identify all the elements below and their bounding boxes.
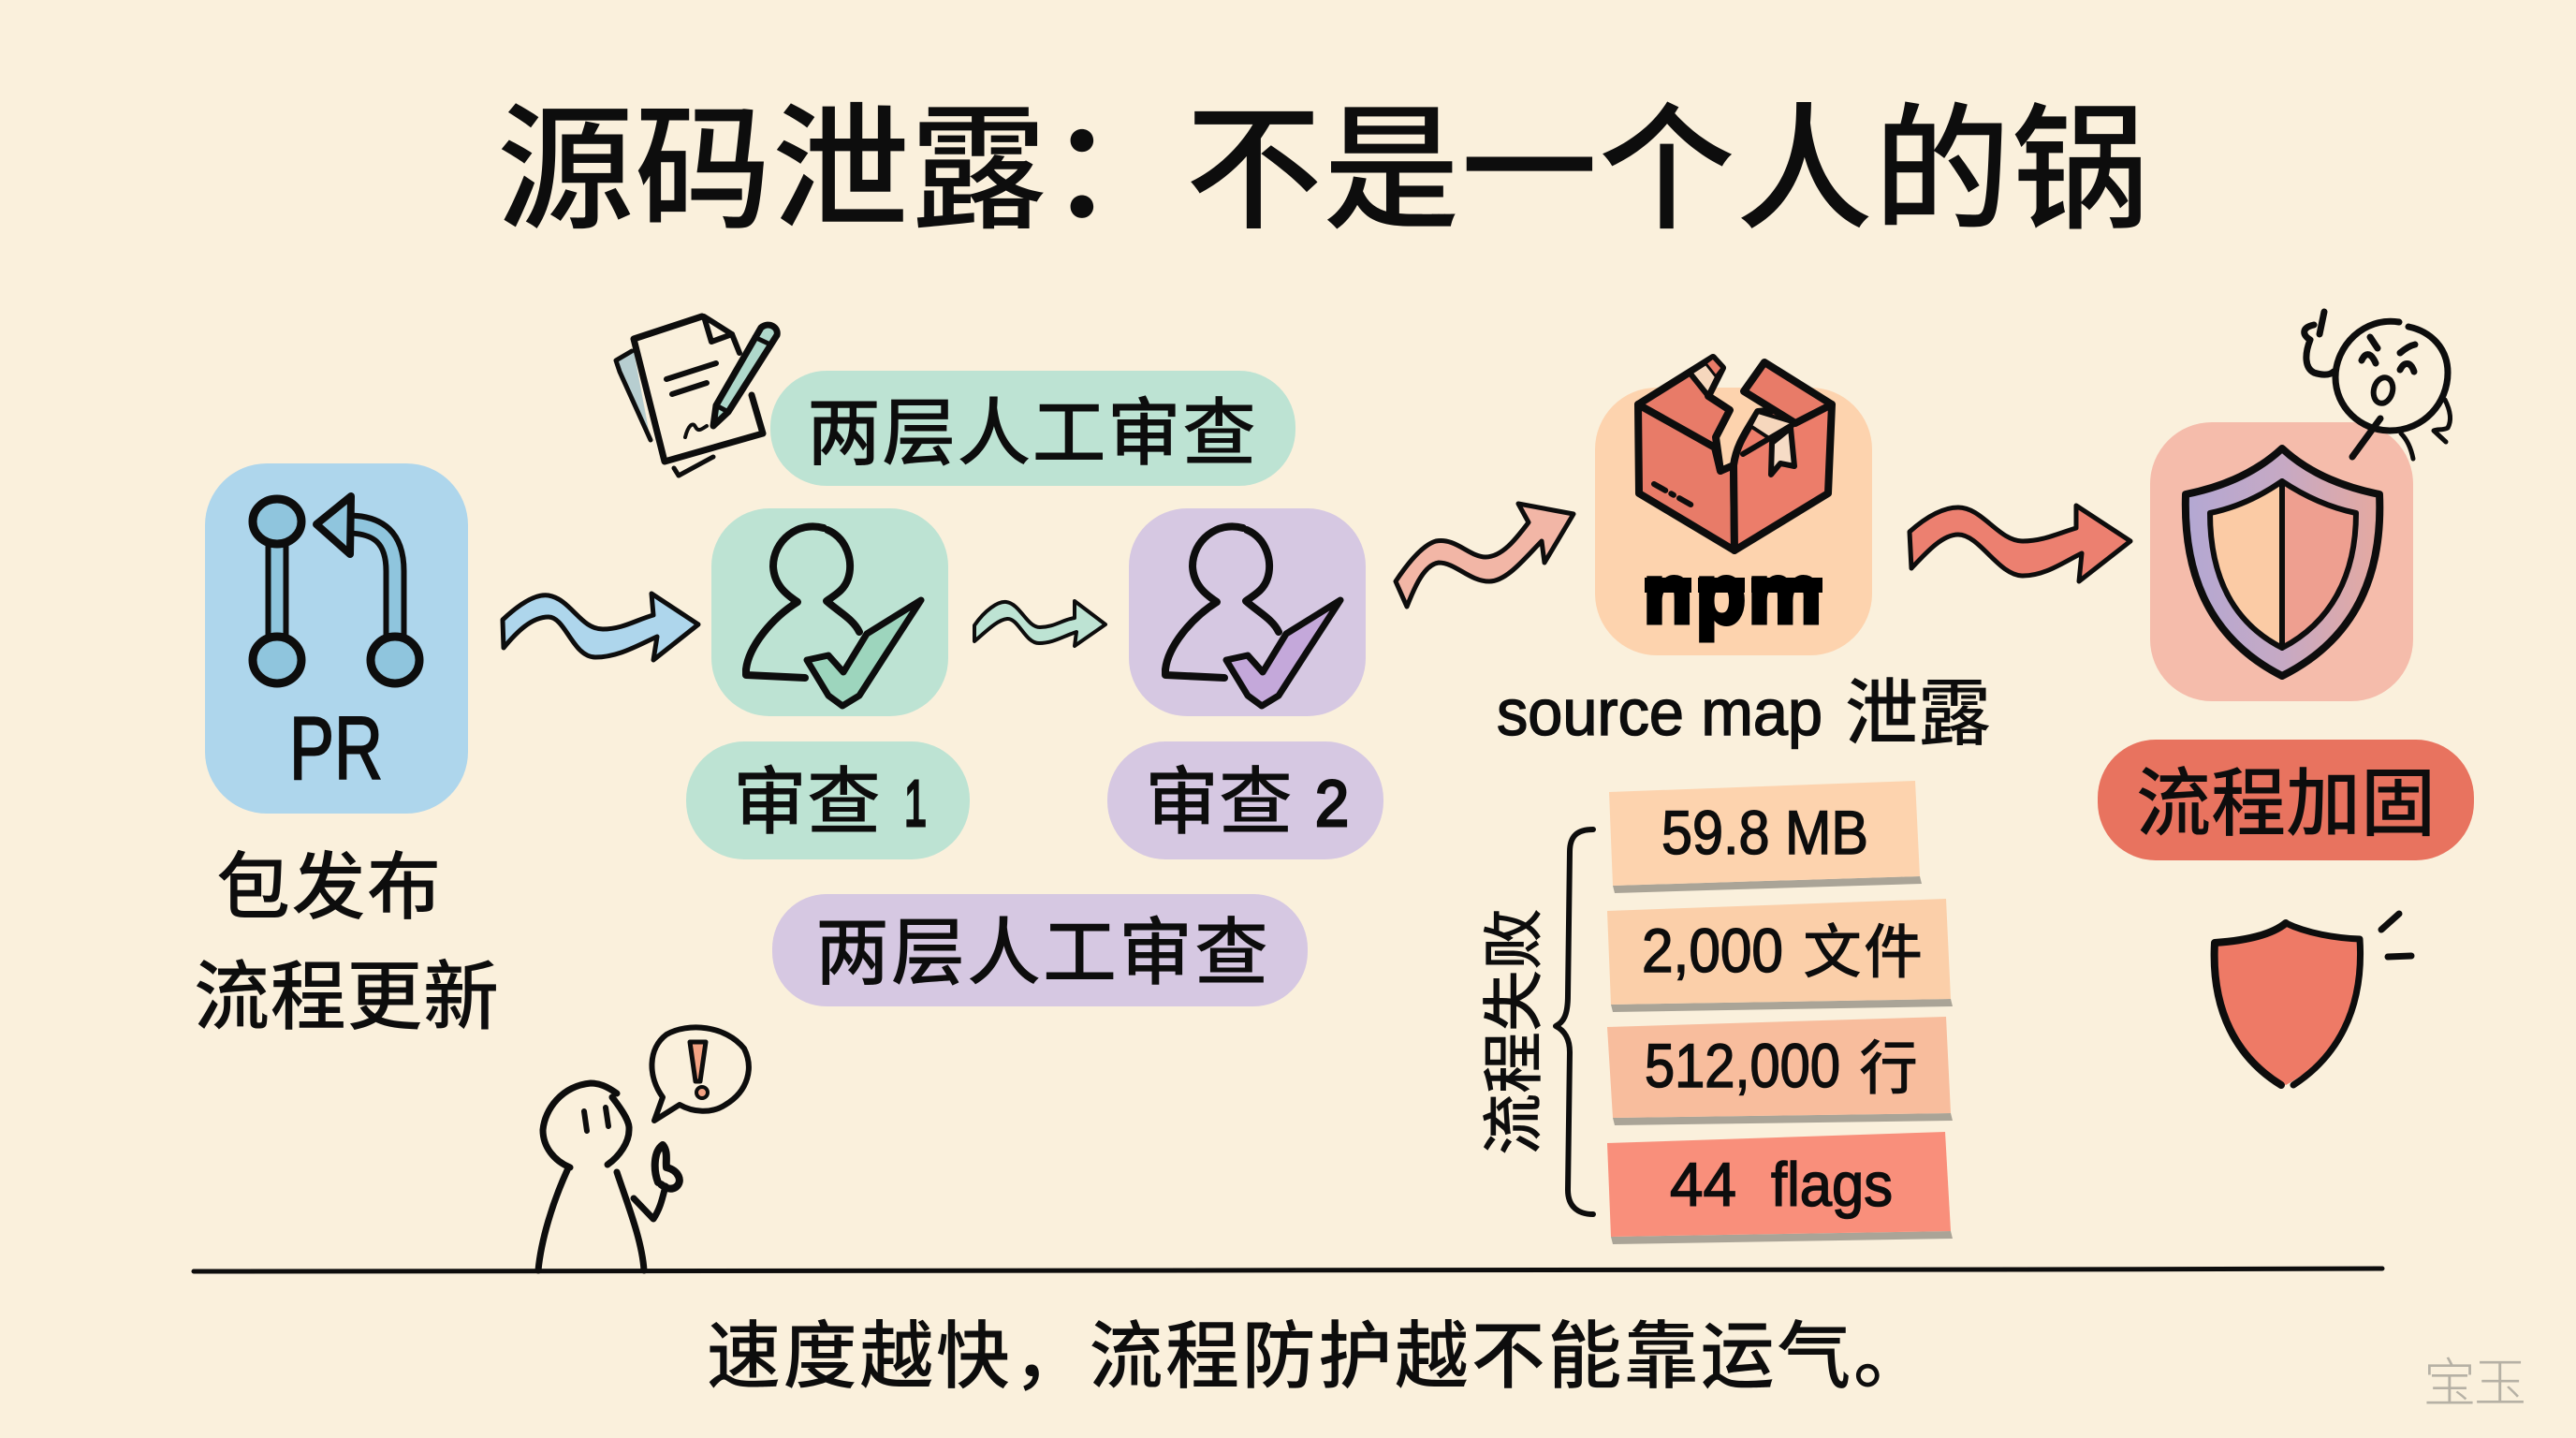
pill: process hardening: 流程加固	[2136, 743, 2436, 852]
ground line	[194, 1269, 2382, 1271]
arrow: review 1 to review 2	[974, 601, 1105, 646]
label: PR: PR	[289, 698, 383, 799]
pill: review 2: 2	[1315, 767, 1349, 840]
pill: two-layer human review (green): 两层人工审查	[807, 373, 1256, 480]
arrow: PR to review	[503, 594, 698, 660]
sticker: flags	[1607, 1132, 1953, 1244]
sticker: files: 文件	[1803, 905, 1923, 990]
icon: pull request	[253, 496, 419, 683]
brace and label: process failure: 流程失败	[1464, 908, 1554, 1155]
icon: torn box	[1638, 358, 1832, 550]
arrow: review to npm	[1396, 504, 1573, 607]
panel: npm package	[1595, 358, 1872, 655]
panel: reviewer 1	[711, 508, 948, 716]
figure: angry stick figure	[2305, 312, 2451, 459]
panel: reviewer 2	[1129, 508, 1366, 716]
text: source map leak: source map	[1497, 676, 1822, 749]
icon: reviewer check	[1165, 526, 1340, 706]
sticker: lines	[1607, 1017, 1953, 1125]
pill: two-layer human review (purple): 两层人工审查	[815, 892, 1268, 1000]
sticker: size	[1609, 781, 1922, 893]
title: 源码泄露：不是一个人的锅	[497, 60, 2148, 257]
takeaway text: 速度越快，流程防护越不能靠运气。	[707, 1296, 1927, 1403]
text: package release process: 流程更新	[194, 936, 499, 1046]
panel: PR	[205, 463, 468, 814]
pill: review 1: 审查	[733, 741, 881, 849]
text: package release process: 包发布	[216, 827, 441, 934]
sticker: files: 2,000	[1642, 916, 1783, 985]
text: package release process	[194, 827, 499, 1046]
text: source map leak	[1497, 655, 1991, 760]
brace and label: process failure	[1464, 829, 1593, 1214]
panel: shield	[2150, 422, 2413, 701]
sticker: flags: flags	[1771, 1150, 1893, 1219]
sticker: flags: 44	[1670, 1150, 1736, 1219]
figure: stick figure with speech bubble	[538, 1027, 749, 1270]
watermark: 宝玉	[2423, 1342, 2526, 1417]
pill: review 2: 审查	[1145, 741, 1293, 849]
pill: review 2	[1107, 741, 1383, 859]
sticker: files	[1607, 899, 1953, 1012]
icon: small shield with ticks	[2215, 914, 2411, 1085]
arrow: npm to hardening	[1910, 506, 2130, 581]
sticker: lines: 行	[1859, 1021, 1918, 1107]
icon: reviewer check	[746, 526, 921, 706]
speech bubble with exclamation	[651, 1027, 749, 1121]
text: source map leak: 泄露	[1845, 655, 1991, 760]
icon: shield	[2186, 448, 2379, 676]
sticker: lines: 512,000	[1645, 1031, 1840, 1100]
sticker: size: 59.8 MB	[1661, 798, 1868, 867]
icon: document and pencil	[616, 316, 777, 476]
pill: review 1: 1	[904, 767, 927, 840]
logo: npm: npm	[1642, 546, 1823, 644]
pill: review 1	[686, 741, 970, 859]
